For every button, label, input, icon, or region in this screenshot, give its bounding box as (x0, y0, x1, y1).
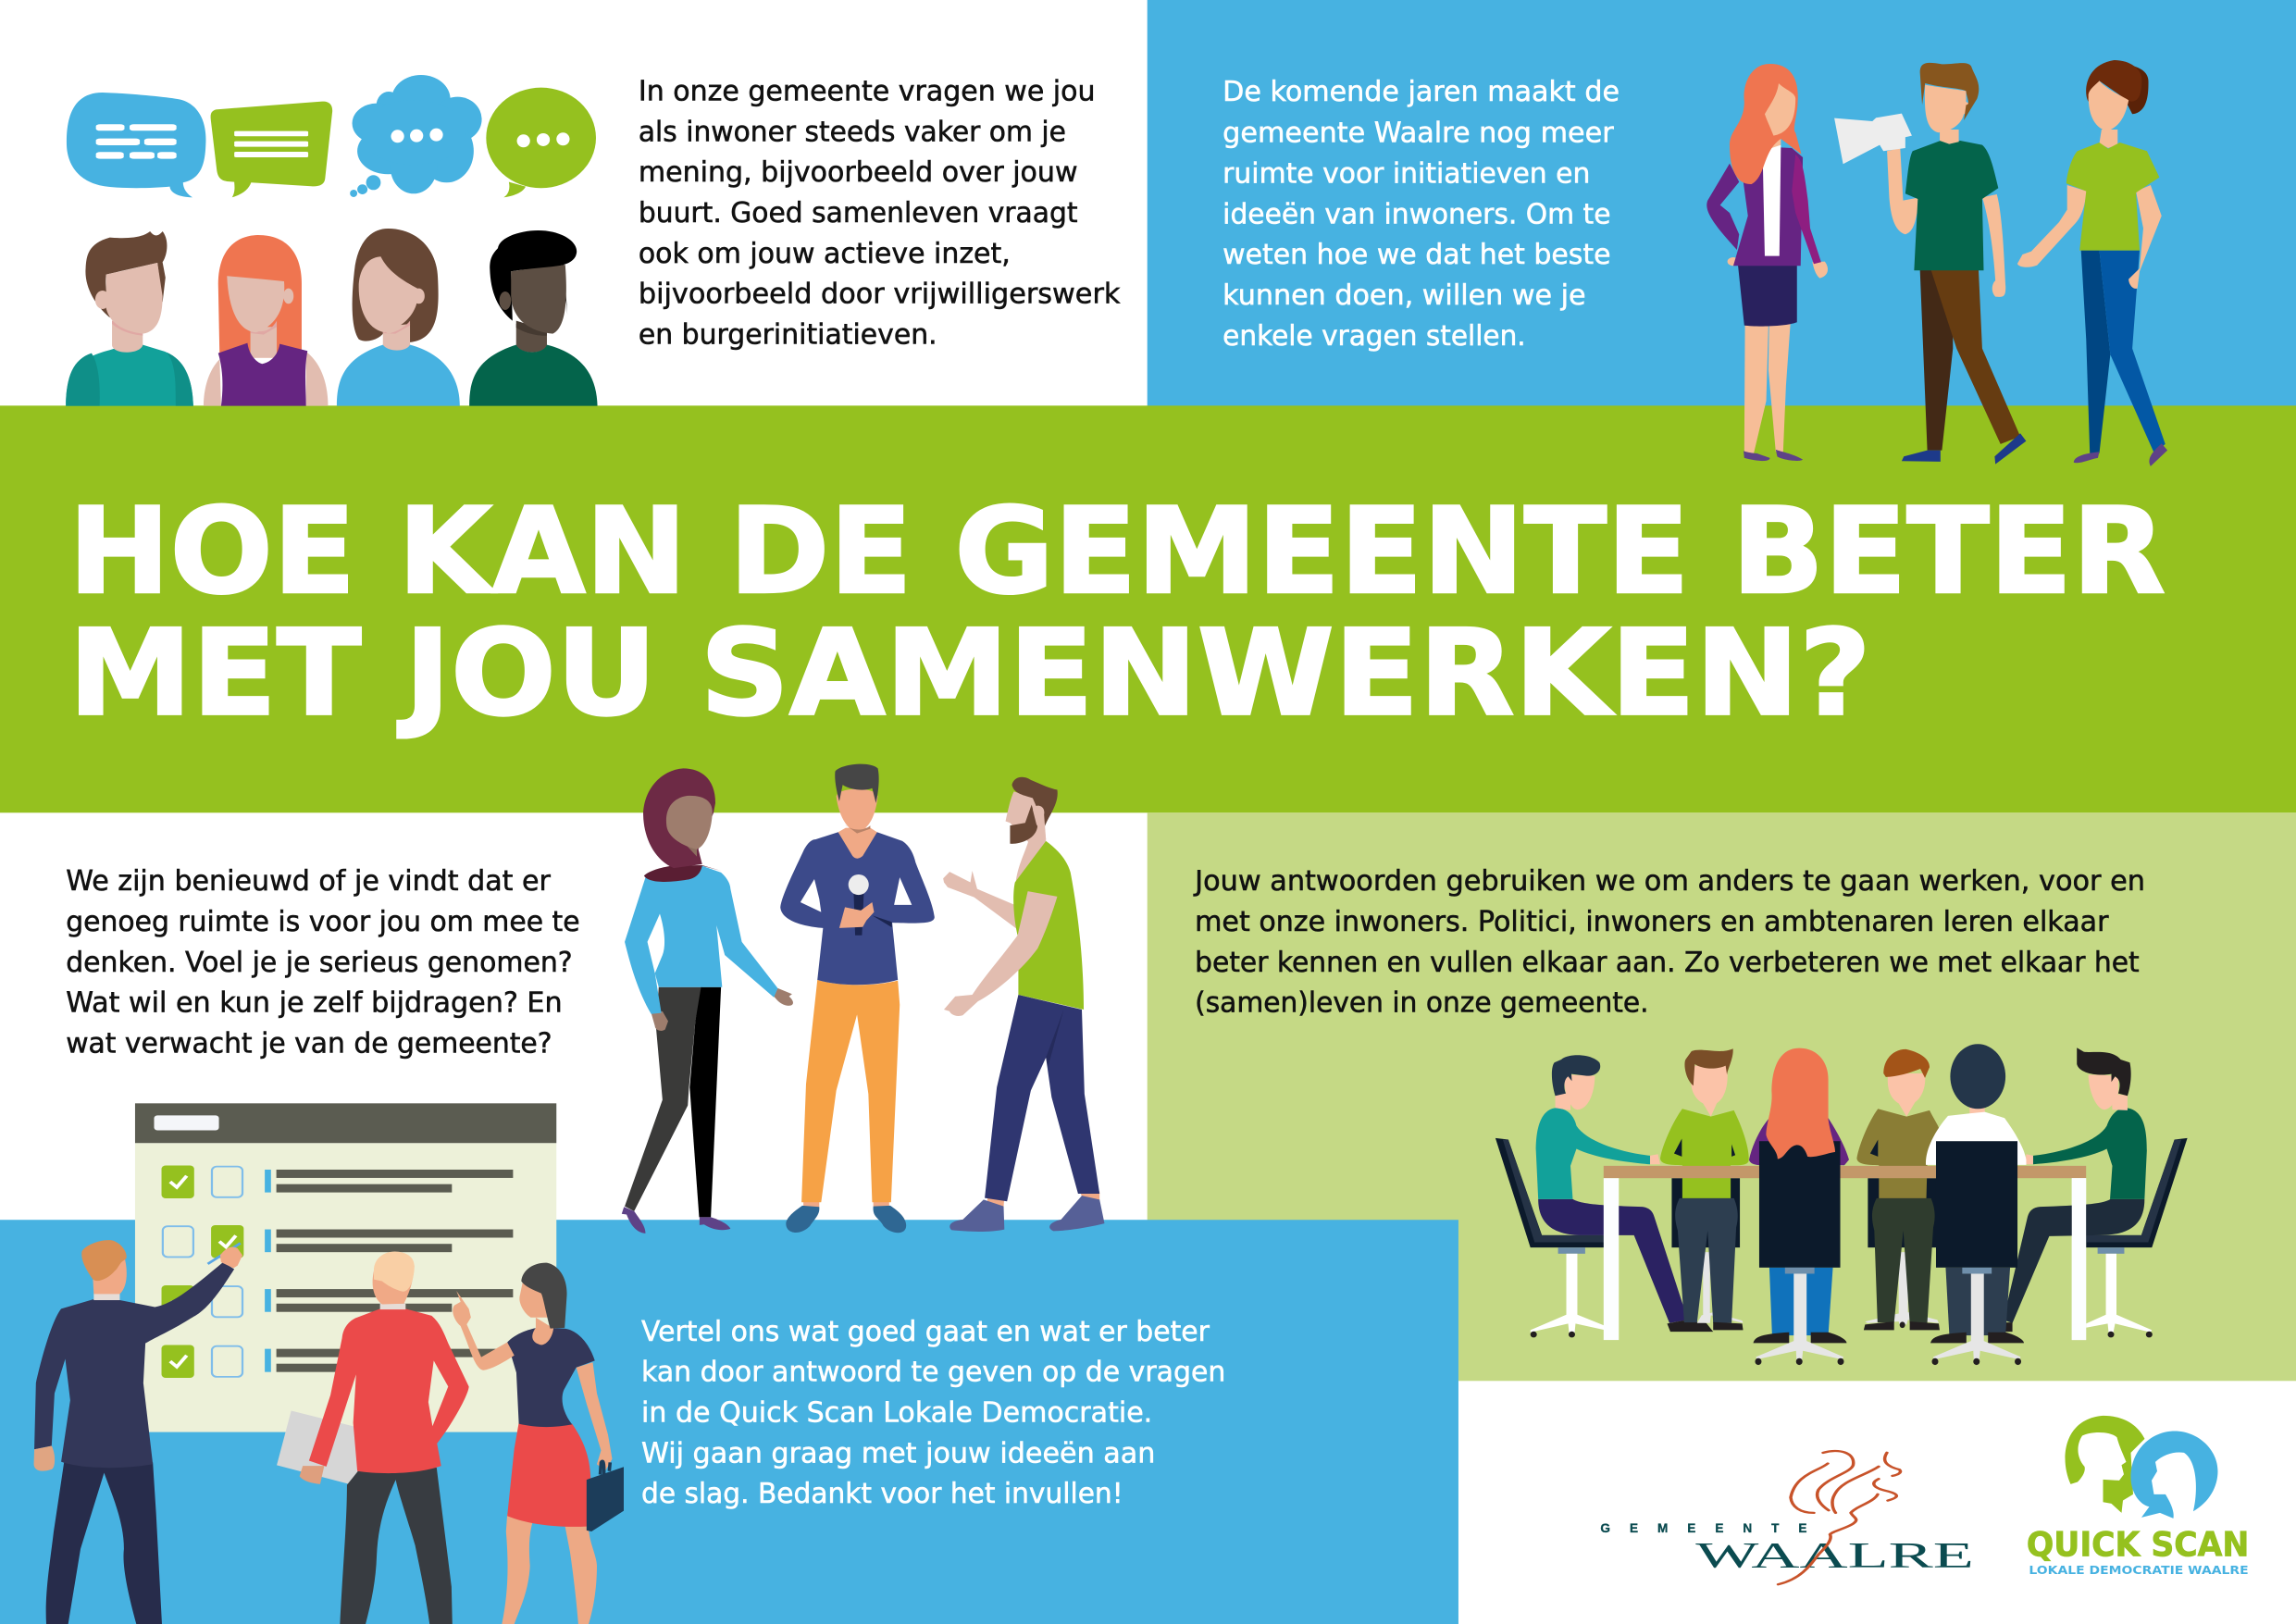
icon: thought cloud (350, 75, 482, 197)
text block: call to action: kan door antwoord te geven op de vragen (641, 1357, 1225, 1389)
text block: intro: en burgerinitiatieven. (639, 319, 937, 352)
figure: table (1604, 1166, 2086, 1340)
text block: questions: denken. Voel je je serieus genomen? (66, 947, 573, 979)
text block: questions (66, 865, 580, 1060)
text block: top right (1222, 76, 1620, 353)
icon: Waalre flame mark (1778, 1451, 1901, 1584)
text block: call to action (641, 1316, 1225, 1510)
icon: woman with orange hair (204, 235, 328, 406)
figure: woman in green shirt (2017, 60, 2167, 466)
icon: blue speech bubble (67, 93, 205, 197)
illustration: speech bubbles and four heads (66, 75, 598, 406)
text block: intro: als inwoner steeds vaker om je (639, 116, 1066, 148)
logo: gemeente Waalre: GEMEENTE (1600, 1521, 1807, 1535)
text block: intro: bijvoorbeeld door vrijwilligerswerk (639, 279, 1121, 311)
figure: person seen from behind with orange hair (1749, 1048, 1849, 1365)
text block: top right: weten hoe we dat het beste (1222, 239, 1610, 271)
figure: seated man in dark green (1982, 1048, 2188, 1340)
icon: green speech bubble (211, 102, 332, 197)
text block: call to action: in de Quick Scan Lokale Democratie. (641, 1396, 1152, 1429)
logo: gemeente Waalre: WAALRE (1695, 1534, 1974, 1575)
icon: man with black hair (469, 230, 598, 406)
figure: person in olive facing (1856, 1049, 1941, 1330)
text block: call to action: Wij gaan graag met jouw ideeën aan (641, 1437, 1155, 1469)
logo: Quick Scan (2027, 1416, 2249, 1577)
figure: man with megaphone (1834, 63, 2026, 465)
icon: man in teal shirt (66, 231, 193, 406)
panel: title band green (0, 405, 2296, 812)
icon: woman with brown hair (337, 229, 460, 406)
figure: woman with hijab (622, 768, 793, 1233)
panel: top right blue (1148, 0, 2296, 407)
illustration: three people with megaphone (1706, 60, 2167, 466)
text block: call to action: Vertel ons wat goed gaat en wat er beter (641, 1316, 1210, 1348)
text block: top right: ruimte voor initiatieven en (1222, 157, 1590, 190)
text block: questions: wat verwacht je van de gemeente? (66, 1028, 552, 1060)
text block: top right: gemeente Waalre nog meer (1222, 118, 1614, 150)
chart: checklist board (135, 1103, 556, 1432)
title (68, 483, 2166, 743)
text block: intro (639, 76, 1121, 352)
figure: woman in red skirt (453, 1263, 624, 1624)
figure: man with microphone (780, 764, 935, 1233)
text block: answers: (samen)leven in onze gemeente. (1195, 987, 1649, 1020)
text block: answers (1193, 865, 2145, 1020)
logo: gemeente Waalre (1600, 1451, 1974, 1584)
text block: top right: ideeën van inwoners. Om te (1222, 198, 1610, 230)
logo: Quick Scan: QUICK SCAN (2027, 1525, 2249, 1565)
text block: intro: ook om jouw actieve inzet, (639, 238, 1011, 270)
text block: intro: mening, bijvoorbeeld over jouw (639, 156, 1078, 189)
panel: bottom blue (0, 1220, 1458, 1624)
text block: top right: De komende jaren maakt de (1222, 76, 1620, 108)
title: MET JOU SAMENWERKEN? (68, 605, 1871, 743)
text block: answers: Jouw antwoorden gebruiken we om anders te gaan werken, voor en (1193, 865, 2145, 898)
title: HOE KAN DE GEMEENTE BETER (68, 483, 2166, 621)
figure: person in green facing (1660, 1048, 1749, 1330)
figure: person seen from behind in white (1926, 1044, 2026, 1365)
figure: man in suit (34, 1240, 242, 1624)
figure: seated man in teal (1536, 1055, 1713, 1332)
figure: bearded man (943, 777, 1104, 1232)
figure: man in red sweater (277, 1252, 469, 1624)
figure: woman in purple jacket (1706, 64, 1828, 461)
text block: intro: In onze gemeente vragen we jou (639, 76, 1096, 108)
text block: intro: buurt. Goed samenleven vraagt (639, 197, 1078, 229)
illustration: three people talking (622, 764, 1104, 1233)
icon: two head silhouettes (2066, 1416, 2217, 1519)
figure: left chair (1496, 1138, 1604, 1337)
text block: top right: enkele vragen stellen. (1222, 320, 1526, 353)
illustration: meeting around table (1496, 1044, 2188, 1365)
text block: top right: kunnen doen, willen we je (1222, 279, 1586, 312)
text block: questions: genoeg ruimte is voor jou om mee te (66, 906, 580, 938)
illustration: checklist board with three people (34, 1103, 624, 1624)
text block: answers: beter kennen en vullen elkaar aan. Zo verbeteren we met elkaar het (1195, 947, 2140, 979)
text block: questions: Wat wil en kun je zelf bijdragen? En (66, 987, 563, 1020)
logo: Quick Scan: LOKALE DEMOCRATIE WAALRE (2029, 1564, 2249, 1577)
icon: green round speech bubble (486, 88, 596, 197)
text block: call to action: de slag. Bedankt voor het invullen! (641, 1478, 1123, 1510)
text block: answers: met onze inwoners. Politici, inwoners en ambtenaren leren elkaar (1195, 906, 2109, 938)
text block: questions: We zijn benieuwd of je vindt dat er (66, 865, 552, 898)
panel: right light green (1148, 812, 2296, 1381)
